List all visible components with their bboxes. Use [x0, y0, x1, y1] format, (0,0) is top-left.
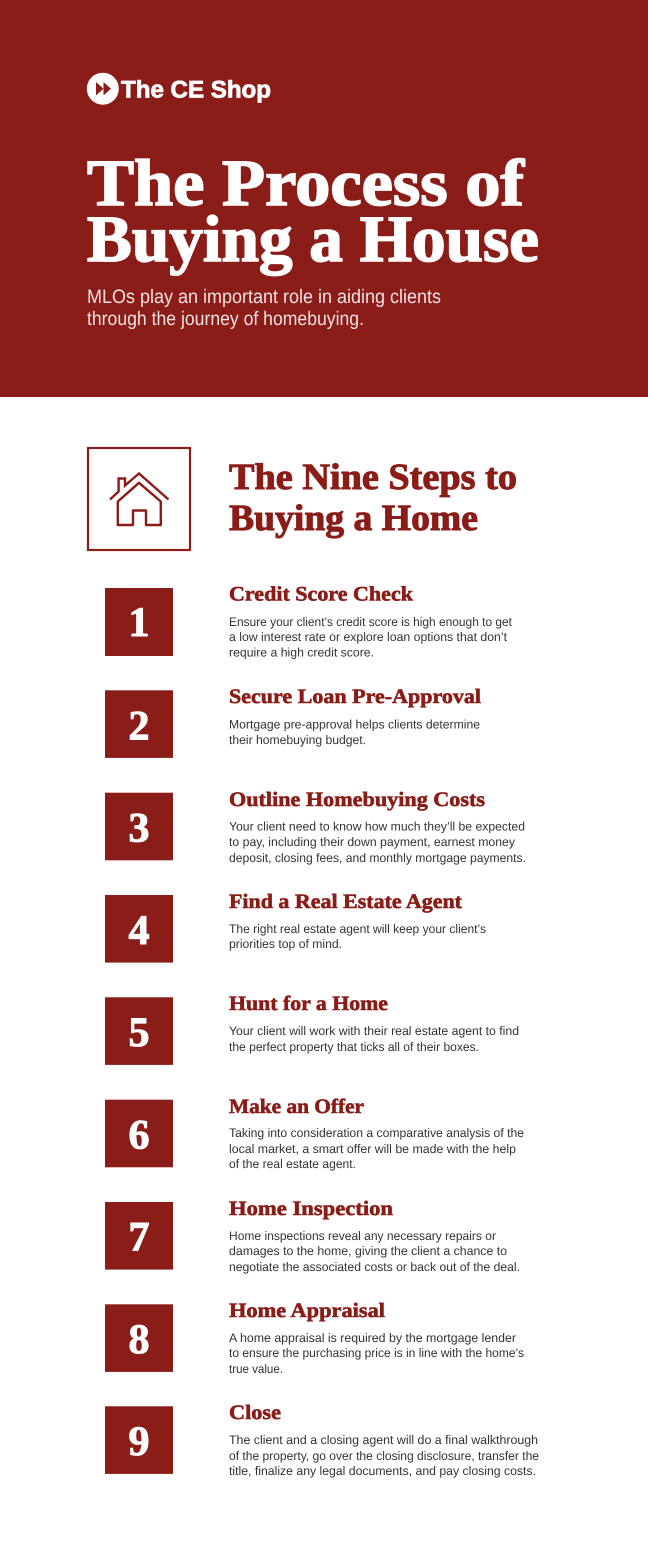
step 3 text: Your client need to know how much they’ll be expected — [229, 819, 525, 833]
number badge 3 — [105, 793, 173, 860]
number badge 9 — [105, 1406, 173, 1474]
number badge 6 — [105, 1100, 173, 1167]
number badge 2 — [105, 690, 173, 758]
step 3 — [105, 789, 526, 865]
step 9 text: title, finalize any legal documents, and pay closing costs. — [229, 1464, 536, 1478]
number badge 4: 4 — [128, 908, 150, 954]
step 5 — [105, 993, 519, 1065]
step 1 text: require a high credit score. — [229, 646, 374, 660]
step 5 text: the perfect property that ticks all of their boxes. — [229, 1040, 479, 1054]
step 6 text — [229, 1126, 524, 1171]
step 4 text: The right real estate agent will keep your client’s — [229, 922, 486, 936]
number badge 5 — [105, 997, 173, 1065]
step 3 text: to pay, including their down payment, earnest money — [229, 835, 516, 849]
subtitle — [87, 286, 441, 330]
step 9 text — [229, 1433, 539, 1478]
step 9 heading: Close — [229, 1402, 281, 1424]
step 4 text: priorities top of mind. — [229, 937, 342, 951]
number badge 6: 6 — [128, 1112, 150, 1158]
step 1 text: Ensure your client’s credit score is high enough to get — [229, 615, 513, 629]
step 8 text — [229, 1331, 524, 1376]
step 2 text: Mortgage pre-approval helps clients determine — [229, 717, 480, 731]
step 4 — [105, 891, 486, 963]
step 5 text — [229, 1024, 519, 1054]
icon: house in outlined square — [88, 448, 190, 550]
step 6 — [105, 1096, 524, 1171]
step 7 text: Home inspections reveal any necessary repairs or — [229, 1229, 496, 1243]
heading — [229, 457, 517, 539]
heading: The Nine Steps to — [229, 457, 517, 498]
panel: header — [0, 0, 648, 397]
title: Buying a House — [87, 203, 539, 276]
step 9 text: The client and a closing agent will do a final walkthrough — [229, 1433, 538, 1447]
title: The Process of — [87, 147, 525, 220]
step 1 heading: Credit Score Check — [229, 584, 414, 606]
number badge 4 — [105, 895, 173, 963]
heading: Buying a Home — [229, 498, 478, 539]
number badge 1 — [105, 588, 173, 656]
step 9 text: of the property, go over the closing disclosure, transfer the — [229, 1449, 539, 1463]
step 1 text — [229, 615, 513, 660]
step 8 heading: Home Appraisal — [229, 1300, 385, 1322]
step 7 text — [229, 1229, 520, 1274]
title — [87, 147, 539, 276]
number badge 2: 2 — [128, 704, 150, 750]
number badge 5: 5 — [128, 1010, 150, 1056]
step 8 text: to ensure the purchasing price is in line with the home’s — [229, 1346, 524, 1360]
number badge 7: 7 — [128, 1214, 150, 1260]
step 3 text — [229, 819, 526, 865]
step 6 heading: Make an Offer — [229, 1096, 364, 1118]
subtitle: through the journey of homebuying. — [87, 308, 364, 330]
panel: section heading — [88, 448, 517, 550]
step 8 — [105, 1300, 524, 1376]
number badge 1: 1 — [128, 600, 150, 646]
step 9 — [105, 1402, 539, 1478]
number badge 7 — [105, 1202, 173, 1270]
step 3 text: deposit, closing fees, and monthly mortgage payments. — [229, 851, 526, 865]
step 3 heading: Outline Homebuying Costs — [229, 789, 485, 811]
step 2 — [105, 686, 481, 758]
step 2 text: their homebuying budget. — [229, 733, 366, 747]
step 2 text — [229, 717, 480, 747]
step 8 text: A home appraisal is required by the mortgage lender — [229, 1331, 516, 1345]
step 1 — [105, 584, 513, 660]
number badge 8: 8 — [128, 1317, 150, 1363]
number badge 8 — [105, 1304, 173, 1372]
step 4 heading: Find a Real Estate Agent — [229, 891, 462, 913]
step 5 heading: Hunt for a Home — [229, 993, 388, 1015]
step 8 text: true value. — [229, 1362, 283, 1376]
number badge 9: 9 — [128, 1419, 150, 1465]
subtitle: MLOs play an important role in aiding clients — [87, 286, 441, 308]
step 7 — [105, 1198, 520, 1274]
step 6 text: of the real estate agent. — [229, 1157, 356, 1171]
step 7 heading: Home Inspection — [229, 1198, 394, 1220]
step 5 text: Your client will work with their real estate agent to find — [229, 1024, 519, 1038]
step 2 heading: Secure Loan Pre-Approval — [229, 686, 481, 708]
step 6 text: Taking into consideration a comparative analysis of the — [229, 1126, 524, 1140]
step 1 text: a low interest rate or explore loan options that don’t — [229, 630, 508, 644]
step 4 text — [229, 922, 486, 951]
logo: The CE Shop — [87, 73, 271, 105]
number badge 3: 3 — [128, 806, 150, 852]
step 7 text: negotiate the associated costs or back out of the deal. — [229, 1260, 520, 1274]
logo: The CE Shop: The CE Shop — [121, 76, 271, 104]
step 7 text: damages to the home, giving the client a chance to — [229, 1244, 507, 1258]
step 6 text: local market, a smart offer will be made with the help — [229, 1142, 516, 1156]
